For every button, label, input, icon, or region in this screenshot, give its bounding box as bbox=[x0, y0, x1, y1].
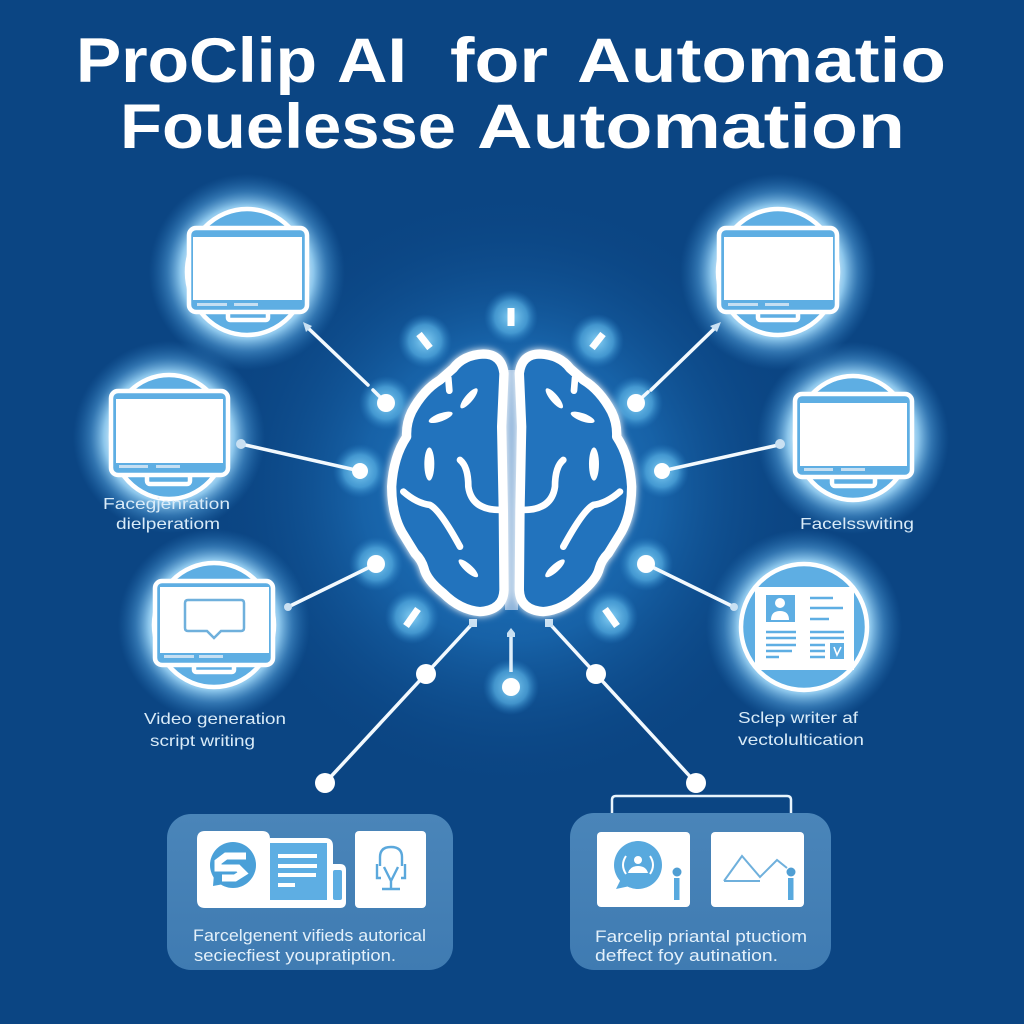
title bbox=[76, 26, 946, 162]
panel text: deffect foy autination. bbox=[595, 947, 778, 965]
label: script writer: Sclep writer af bbox=[738, 710, 859, 727]
connector: bottom-left to panel bbox=[315, 619, 477, 793]
connector: top-left bbox=[303, 322, 413, 430]
panel text: Farcelip priantal ptuctiom bbox=[595, 928, 807, 946]
label: script writer: vectolultication bbox=[738, 732, 864, 749]
label: video generation bbox=[144, 711, 286, 750]
icon: brain bbox=[392, 354, 632, 612]
title: for bbox=[450, 26, 548, 96]
title: AI bbox=[337, 26, 407, 96]
panel text bbox=[595, 928, 807, 965]
bracket above right panel bbox=[612, 796, 791, 813]
icon: speech bubble bbox=[185, 600, 244, 638]
connector: lower-left bbox=[284, 537, 403, 611]
title: Fouelesse bbox=[120, 92, 456, 162]
icon: S chat card with document bbox=[197, 831, 346, 908]
icon: top-left monitor bbox=[149, 174, 345, 370]
label: face generation: dielperatiom bbox=[116, 516, 220, 533]
connector: bottom-center bbox=[483, 628, 539, 715]
icon: microphone card bbox=[355, 831, 426, 908]
label: face generation bbox=[103, 496, 230, 533]
icon: top-right monitor bbox=[680, 174, 876, 370]
connector: middle-left bbox=[236, 439, 387, 498]
panel text: Farcelgenent vifieds autorical bbox=[193, 927, 426, 945]
label: video generation: Video generation bbox=[144, 711, 286, 728]
label: video generation: script writing bbox=[150, 733, 255, 750]
connector: middle-right bbox=[635, 439, 785, 498]
panel: bottom-right bbox=[570, 813, 831, 970]
icon: mountain card bbox=[711, 832, 804, 907]
title: Automation bbox=[477, 92, 905, 162]
left hemisphere bbox=[392, 354, 504, 612]
right hemisphere bbox=[519, 354, 632, 612]
glow rays around brain bbox=[385, 290, 638, 644]
panel text: seciecfiest youpratiption. bbox=[194, 947, 396, 965]
icon: chat card bbox=[597, 832, 690, 907]
icon: middle-left monitor bbox=[73, 341, 265, 533]
icon: profile document bbox=[706, 529, 902, 725]
connector: top-right bbox=[609, 322, 721, 430]
icon: middle-right monitor bbox=[757, 342, 949, 534]
title: ProClip bbox=[76, 26, 317, 96]
panel: bottom-left bbox=[167, 814, 453, 970]
title: Automatio bbox=[577, 26, 946, 96]
label: faceless writing: Facelsswiting bbox=[800, 516, 914, 533]
label: face generation: Facegjenration bbox=[103, 496, 230, 513]
connector: bottom-right to panel bbox=[545, 619, 706, 793]
panel text bbox=[193, 927, 426, 965]
icon: video monitor with speech bubble bbox=[118, 529, 310, 721]
label: script writer bbox=[738, 710, 864, 749]
connector: lower-right bbox=[619, 537, 738, 611]
